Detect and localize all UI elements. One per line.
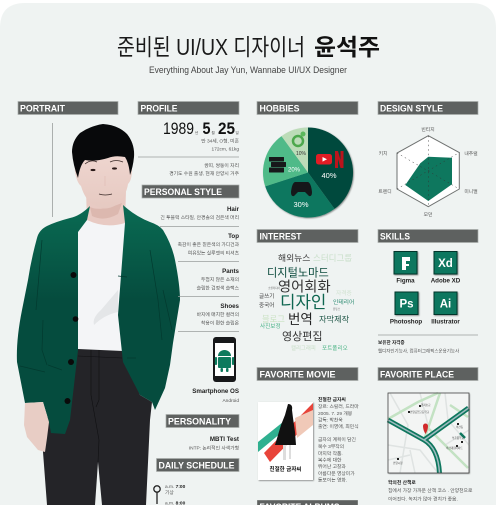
heading: portrait (18, 102, 118, 114)
place caption: 집에서 가장 가까운 산책 코스 . 안양천으로 (388, 487, 473, 494)
radar labels: 미니멀 (464, 188, 478, 195)
movie details: 마지막 작품. (318, 450, 343, 457)
trousers (43, 348, 152, 505)
word cloud: 스터디그룹 (313, 253, 352, 263)
certificates (378, 339, 460, 354)
heading: interest: INTEREST (260, 232, 302, 242)
place caption: 이어진다. 녹지가 많아 경치가 좋음. (388, 496, 458, 502)
movie details: 복수 3부작의 (318, 443, 344, 450)
place caption: 학의천 산책로 (388, 479, 416, 486)
buttons (64, 272, 78, 404)
map: 비산대림아파트 (446, 446, 463, 450)
panel: design style (378, 102, 478, 218)
radar labels: 트렌디 (378, 188, 392, 195)
radar labels: 내추럴 (464, 150, 478, 157)
heading: personal style: PERSONAL STYLE (144, 187, 222, 198)
hair style (160, 206, 240, 221)
panel: daily schedule (154, 458, 239, 505)
word cloud: 인테리어 (333, 298, 354, 306)
movie poster: 친절한 금자씨 (270, 465, 301, 473)
shoes style: Shoes (220, 303, 240, 310)
facial features (85, 160, 123, 195)
hair style: Hair (227, 206, 240, 213)
top style (178, 233, 240, 256)
title: 윤석주 (314, 34, 380, 60)
subtitle: Everything About Jay Yun, Wannabe UI/UX Designer (149, 65, 347, 76)
movie details: 출연: 이영애, 최민식 (318, 423, 359, 430)
word cloud: 자막제작 (319, 314, 350, 324)
skill: adobe xd (431, 252, 461, 284)
icon: video streaming (316, 151, 344, 168)
pie labels: 30% (293, 200, 309, 209)
word cloud: 블로그 (262, 314, 285, 324)
heading: favorite place: FAVORITE PLACE (380, 370, 454, 380)
heading: favorite movie: FAVORITE MOVIE (260, 370, 336, 380)
pants style: Pants (222, 268, 240, 275)
movie details: 친절한 금자씨 (318, 396, 346, 403)
smartphone os: Smartphone OS (192, 388, 239, 395)
heading: design style: DESIGN STYLE (380, 104, 443, 114)
movie details (318, 396, 359, 484)
skill: illustrator: Illustrator (431, 318, 460, 326)
birth date: 5 (202, 120, 210, 138)
panel: hobbies (257, 102, 358, 218)
word cloud: 번역 (288, 312, 313, 327)
heading: portrait: PORTRAIT (20, 104, 65, 114)
word cloud: 소셜미디어 (268, 286, 281, 290)
skill: adobe xd: Adobe XD (431, 278, 461, 284)
shoes style: 바지에 매치한 컬러의 (197, 311, 239, 318)
word cloud: 디자인 (280, 293, 326, 312)
top style: 촉감이 좋은 짙은색의 가디건과 (178, 241, 240, 248)
word cloud: 캘리그래피 (291, 344, 316, 352)
pants style: 두껍지 않은 소재의 (201, 276, 239, 283)
certificates: 보유한 자격증 (378, 339, 405, 346)
heading: profile: PROFILE (140, 104, 178, 114)
heading: daily schedule: DAILY SCHEDULE (158, 460, 234, 472)
radar labels: 빈티지 (421, 126, 435, 133)
panel: profile (138, 102, 240, 177)
portrait rule (52, 123, 54, 217)
hair (72, 124, 134, 178)
skill: photoshop: Ps (399, 298, 414, 310)
word cloud: 사진보정 (260, 322, 281, 330)
birthplace facts: 경기도 수원 출생, 현재 안양시 거주 (169, 170, 240, 177)
radar chart (397, 136, 459, 207)
movie details: 감독: 박찬욱 (318, 416, 343, 424)
movie details: 2005. 7. 29 개봉 (318, 410, 353, 417)
panel: favorite albums (257, 500, 358, 505)
panel: personality (166, 414, 239, 452)
neck (86, 190, 126, 228)
word cloud: 해외뉴스 (278, 252, 310, 263)
skill: adobe xd: Xd (438, 258, 453, 270)
map (388, 393, 469, 473)
movie details: 뛰어난 고찰과 (318, 463, 346, 470)
word cloud: 영어회화 (278, 278, 331, 296)
cardigan (17, 206, 90, 434)
face (74, 144, 132, 208)
hair style: 긴 투블럭 스타일, 안경솔의 검은색 머리 (160, 214, 239, 221)
t-shirt (78, 220, 125, 351)
birth date: 일 (236, 130, 239, 135)
word cloud: 디지털노마드 (267, 266, 329, 280)
heading: hobbies: HOBBIES (260, 104, 300, 114)
pie labels: 20% (288, 168, 301, 174)
map: 비산동 (456, 425, 464, 429)
panel: favorite movie (257, 368, 359, 484)
schedule entries (165, 484, 186, 505)
place caption (388, 479, 473, 502)
word cloud (259, 252, 354, 352)
illustration: man in green cardigan (17, 124, 180, 505)
birth date: 월 (212, 130, 215, 135)
icon: game controller (291, 182, 312, 196)
mbti: INTP: 논리적인 사색가형 (189, 444, 239, 452)
movie details: 돋보이는 영화. (318, 476, 347, 484)
birthplace facts: 쌍띠, 쌍둥이 자리 (204, 162, 239, 169)
mbti: MBTI Test (210, 436, 239, 443)
panel: portrait (17, 102, 180, 505)
birthplace facts (169, 162, 240, 177)
pie labels: 40% (321, 171, 337, 180)
smartphone os: Android (222, 398, 239, 404)
word cloud: 중국어 (259, 301, 274, 309)
icon: android phone (213, 337, 236, 382)
word cloud: 글쓰기 (259, 292, 274, 300)
top style: 여유있는 실루엣의 티셔츠 (188, 250, 240, 256)
radar labels (378, 126, 478, 218)
movie details: 복수에 대한 (318, 456, 342, 464)
skill: figma: Figma (396, 278, 415, 284)
panel: personal style (142, 185, 240, 404)
map: 양지초교 (421, 403, 431, 407)
smartphone os (192, 388, 239, 404)
pie labels: 10% (296, 151, 307, 157)
birth date: 25 (218, 120, 235, 138)
shoes style (197, 303, 240, 326)
skill: photoshop (390, 292, 422, 326)
shoes style: 착용이 편한 슬립온 (201, 320, 240, 326)
birth date (163, 120, 239, 138)
pie chart (263, 127, 353, 218)
skill: illustrator (431, 292, 460, 326)
profile facts: 172cm, 61kg (212, 146, 239, 152)
birth date: 1989 (163, 120, 194, 138)
pants style: 슬림한 검정색 슬랙스 (197, 284, 240, 292)
word cloud: 유튜브 (333, 307, 341, 311)
panel: favorite place (378, 368, 478, 502)
pie labels (288, 151, 337, 209)
top style: Top (228, 233, 239, 240)
schedule entries: a.m. 7:00 (165, 484, 186, 490)
timeline (154, 486, 160, 504)
profile facts: 만 34세, O형, 미혼 (201, 138, 240, 144)
mbti (189, 436, 239, 452)
movie details: 장르: 스릴러, 드라마 (318, 403, 359, 410)
birth date: 년 (195, 130, 198, 135)
heading: skills: SKILLS (380, 232, 410, 242)
certificates: 웹디자인기능사, 컴퓨터그래픽스운용기능사 (378, 348, 460, 354)
schedule entries: 기상 (165, 489, 174, 496)
map: 부흥중학교 (452, 436, 465, 440)
map: 안양공업고등학교 (410, 410, 430, 414)
icon: target (293, 132, 306, 146)
heading: personality: PERSONALITY (168, 416, 232, 428)
panel: skills (378, 230, 478, 354)
skill: photoshop: Photoshop (390, 318, 422, 326)
panel: interest (257, 230, 358, 352)
word cloud: 포트폴리오 (322, 344, 348, 352)
word cloud: 자격증 (336, 289, 352, 297)
radar labels: 모던 (424, 211, 432, 218)
skill: illustrator: Ai (440, 298, 451, 310)
title: 준비된 UI/UX 디자이너 (117, 34, 305, 60)
movie details: 아름다운 영상미가 (318, 470, 355, 477)
icon: books (269, 157, 286, 172)
word cloud: 영상편집 (282, 330, 322, 343)
movie details: 금자의 계획이 담긴 (318, 436, 356, 443)
map: 안양시청 (393, 461, 403, 465)
profile facts (201, 138, 240, 152)
pants style (197, 268, 240, 292)
hand (24, 402, 49, 452)
radar labels: 키치 (379, 150, 387, 157)
